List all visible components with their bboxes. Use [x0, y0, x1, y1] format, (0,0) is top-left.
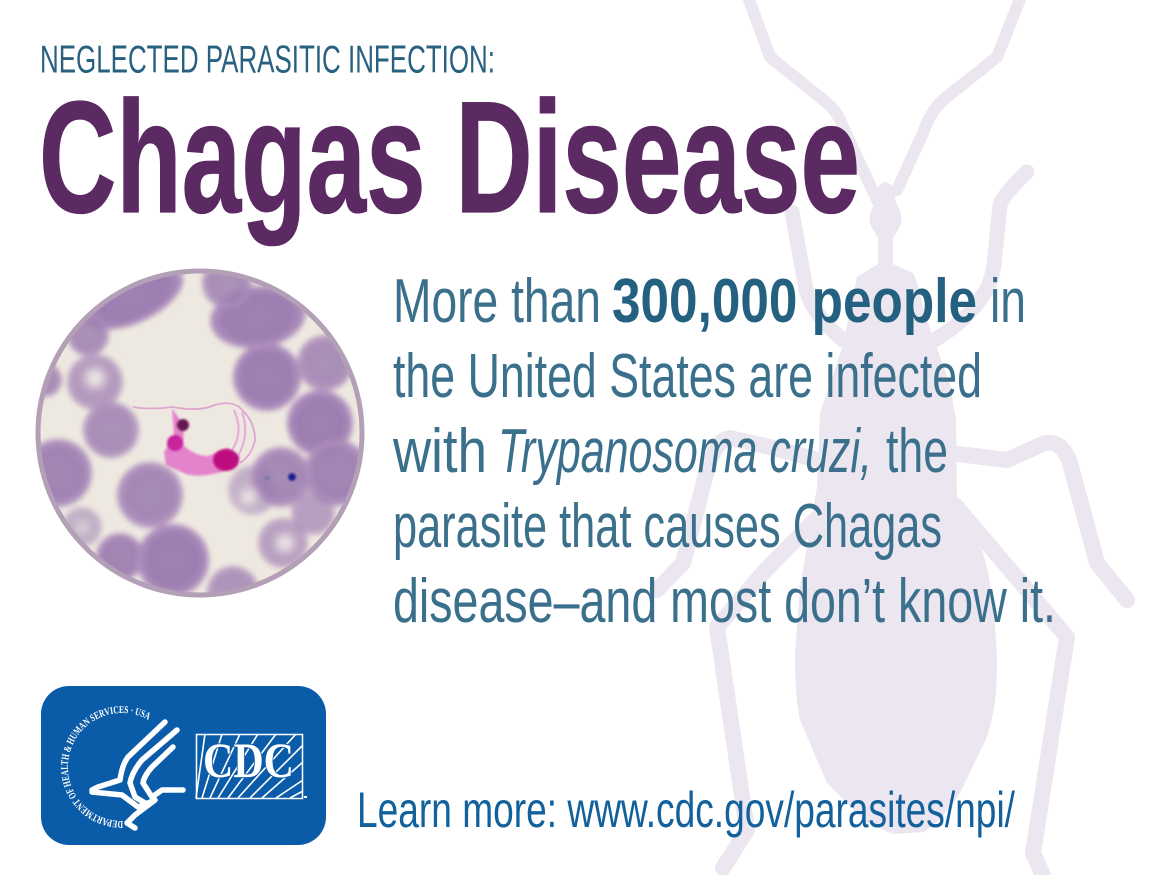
pale cell centres — [77, 368, 294, 552]
main statement text — [392, 267, 1056, 636]
line 1: More than — [393, 267, 601, 336]
line 1: in — [990, 267, 1026, 336]
micrograph of Trypanosoma cruzi — [36, 268, 364, 598]
bug antennae — [747, 0, 1022, 200]
line 1: 300,000 people — [612, 267, 977, 336]
bug front legs — [792, 172, 1027, 345]
line 3 — [392, 417, 948, 486]
subtitle: NEGLECTED PARASITIC INFECTION: — [40, 38, 495, 82]
HHS circular text: DEPARTMENT OF HEALTH & HUMAN SERVICES · USA — [60, 706, 150, 828]
red blood cells — [40, 274, 359, 592]
micrograph border — [38, 271, 362, 595]
icon: kissing bug silhouette — [657, 0, 1127, 875]
CDC logo: CDC — [203, 732, 294, 788]
line 1 — [393, 267, 1026, 336]
HHS eagle emblem — [92, 722, 183, 828]
line 3: Trypanosoma cruzi, — [498, 417, 872, 486]
bug body — [795, 182, 997, 834]
line 3: the — [886, 417, 948, 486]
bug hind legs — [717, 505, 1067, 875]
bug middle legs — [657, 438, 1127, 600]
trypanosome parasite — [133, 403, 255, 476]
logo panel: HHS and CDC — [41, 686, 326, 845]
parasite dots — [265, 473, 296, 481]
line 3: with — [392, 417, 487, 486]
